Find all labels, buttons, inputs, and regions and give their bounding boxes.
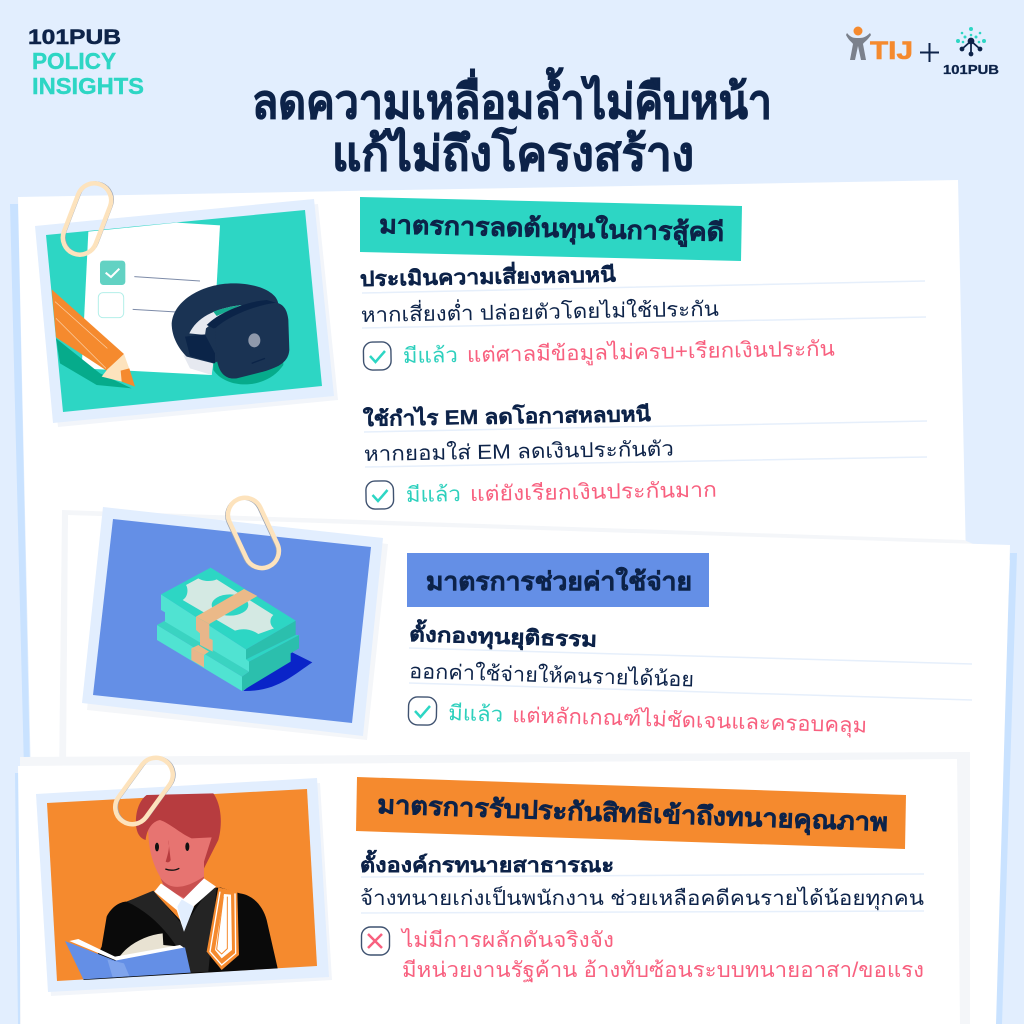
illustration: checklist, pencil and EM ankle monitor	[35, 199, 338, 427]
status: justice fund	[408, 697, 867, 739]
status: risk assessment: มีแล้ว	[403, 344, 458, 368]
status: EM: มีแล้ว	[406, 483, 461, 507]
section 3 heading	[356, 777, 906, 849]
illustration: stack of money	[82, 507, 388, 740]
status: risk assessment: แต่ศาลมีข้อมูลไม่ครบ+เรียกเงินประกัน	[467, 337, 835, 368]
section 3 heading: มาตรการรับประกันสิทธิเข้าถึงทนายคุณภาพ	[377, 791, 888, 839]
measure: EM	[363, 401, 927, 509]
partner logos: TIJ + 101PUB: TIJ	[870, 37, 913, 65]
status: not achieved	[362, 927, 924, 982]
measure: public defender organization	[360, 849, 924, 982]
status: not achieved: ไม่มีการผลักดันจริงจัง	[400, 928, 614, 952]
section 2 heading	[407, 553, 709, 607]
measure: EM: หากยอมใส่ EM ลดเงินประกันตัว	[364, 437, 674, 466]
section 2 heading: มาตรการช่วยค่าใช้จ่าย	[426, 566, 692, 596]
measure: justice fund	[408, 618, 972, 739]
illustration: lawyer reading a book	[36, 778, 332, 996]
panel: paper 1 background	[10, 180, 966, 780]
measure: justice fund: ตั้งกองทุนยุติธรรม	[409, 618, 598, 653]
logo: 101PUB Policy Insights	[28, 26, 144, 99]
status: justice fund: แต่หลักเกณฑ์ไม่ชัดเจนและครอบคลุม	[512, 703, 867, 739]
measure: risk assessment	[360, 260, 926, 370]
measure: public defender organization: จ้างทนายเก่งเป็นพนักงาน ช่วยเหลือคดีคนรายได้น้อยทุกคน	[360, 884, 924, 911]
panel: paper 2 background	[59, 510, 1017, 1024]
measure: justice fund: ออกค่าใช้จ่ายให้คนรายได้น้อย	[409, 659, 694, 691]
logo: 101PUB Policy Insights: 101PUB	[28, 26, 121, 49]
measure: risk assessment: ประเมินความเสี่ยงหลบหนี	[360, 260, 616, 291]
icon: paper clip 1	[58, 177, 117, 260]
panel: paper 3 background	[15, 752, 970, 1024]
partner logos: TIJ + 101PUB	[846, 26, 999, 77]
logo: 101PUB Policy Insights: POLICY	[32, 48, 116, 74]
measure: EM: ใช้กำไร EM ลดโอกาสหลบหนี	[363, 401, 651, 431]
title	[252, 67, 772, 180]
title: ลดความเหลื่อมล้ำไม่คืบหน้า	[252, 67, 772, 128]
status: EM: แต่ยังเรียกเงินประกันมาก	[470, 479, 717, 506]
measure: public defender organization: ตั้งองค์กรทนายสาธารณะ	[360, 849, 614, 877]
section 1 heading	[360, 197, 742, 261]
measure: risk assessment: หากเสี่ยงต่ำ ปล่อยตัวโดยไม่ใช้ประกัน	[361, 295, 719, 327]
title: แก้ไม่ถึงโครงสร้าง	[332, 126, 694, 180]
partner logos: TIJ + 101PUB: 101PUB	[943, 62, 999, 77]
icon: paper clip 2	[221, 492, 284, 574]
icon: paper clip 3	[108, 750, 181, 832]
status: not achieved: มีหน่วยงานรัฐค้าน อ้างทับซ้อนระบบทนายอาสา/ขอแรง	[402, 959, 924, 982]
status: EM	[366, 479, 717, 509]
status: justice fund: มีแล้ว	[448, 702, 504, 727]
status: risk assessment	[363, 337, 835, 370]
logo: 101PUB Policy Insights: INSIGHTS	[32, 73, 144, 99]
section 1 heading: มาตรการลดต้นทุนในการสู้คดี	[379, 209, 724, 249]
